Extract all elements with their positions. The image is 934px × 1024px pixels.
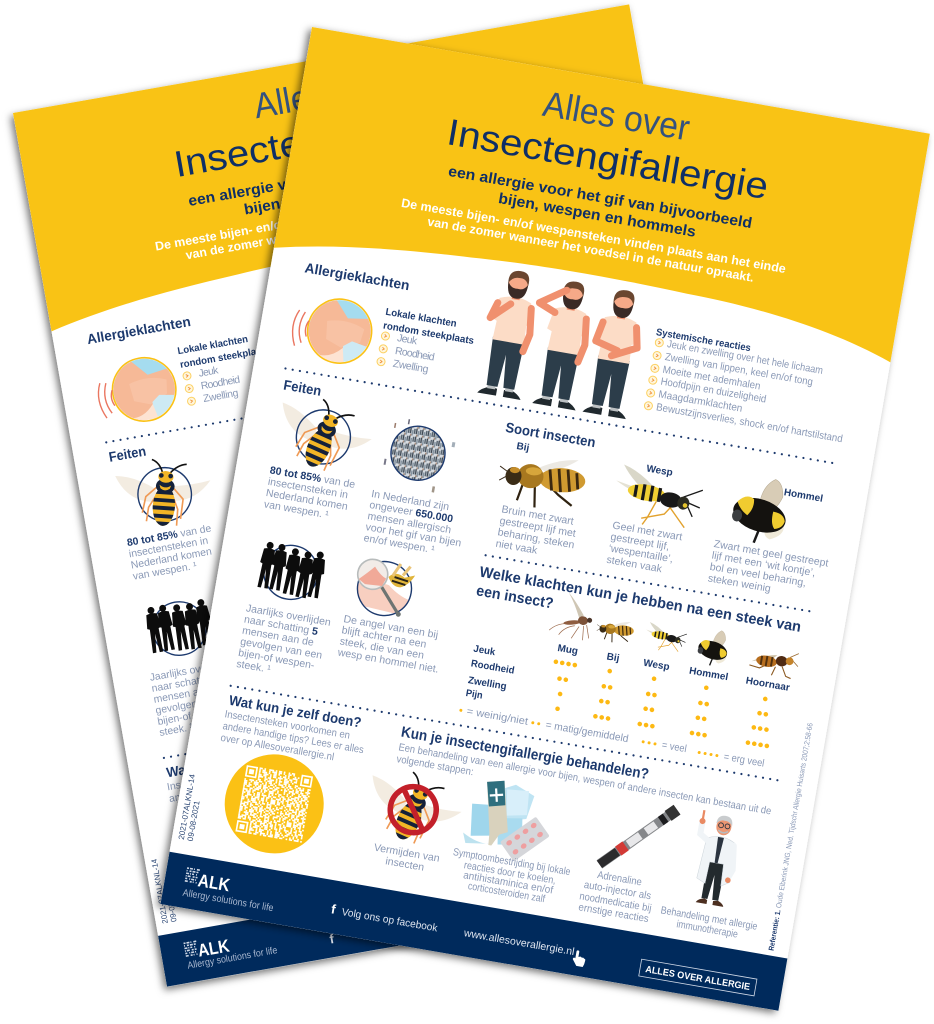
fact: deaths: naar schatting 5	[243, 613, 319, 638]
back fact: deaths: steek. ¹	[159, 722, 195, 739]
column: mug: Mug	[557, 643, 579, 657]
fact: deaths: bijen-of wespen-	[237, 647, 316, 672]
illustration: man with headache	[522, 276, 597, 410]
ALK logo: ALK	[196, 870, 231, 895]
back print code: 2021-07ALKNL-14	[150, 858, 170, 924]
illustration: man touching throat	[477, 267, 542, 400]
text: symptom relief	[447, 846, 572, 909]
row labels: Zwelling	[467, 675, 507, 693]
legend: = veel	[661, 739, 688, 755]
systemic reactions list: Moeite met ademhalen	[662, 364, 762, 392]
legend: = matig/gemiddeld	[545, 719, 630, 745]
local symptoms list: Lokale klachten	[385, 307, 457, 330]
local symptoms list: Jeuk	[396, 332, 419, 348]
row labels: Pijn	[465, 688, 484, 702]
back fact: deaths: gevolgen van een	[155, 692, 238, 717]
illustration: man with stomach ache	[582, 287, 647, 419]
back logo	[184, 927, 279, 972]
icon: prohibited wasp	[362, 764, 467, 855]
fact: deaths: mensen aan de	[241, 625, 315, 649]
fact: stinger: De angel van een bij	[343, 613, 439, 641]
back text: tips: andere handige tips?	[168, 777, 266, 805]
website link: www.allesoverallergie.nl	[462, 927, 575, 958]
text: avoid insects: insecten	[385, 855, 425, 874]
fact: wasps: insectensteken in	[267, 476, 349, 501]
title block	[398, 62, 810, 290]
back local symptoms	[177, 331, 278, 408]
text: bee description: beharing, steken	[497, 526, 575, 551]
text: wasp description: ‘wespentaille’,	[608, 542, 674, 565]
text: symptom relief: corticosteroiden zalf	[467, 880, 546, 905]
fact: deaths: steek. ¹	[235, 658, 272, 676]
systemic reactions list: Bewustzijnsverlies, shock en/of hartstilstand	[655, 401, 844, 445]
back title	[131, 41, 539, 267]
text: symptom relief: antihistaminica en/of	[462, 869, 554, 897]
text: bumblebee description: bol en veel beharing,	[709, 561, 807, 589]
front sheet paper	[161, 27, 930, 1011]
text: adrenaline	[577, 867, 656, 925]
title block: van de zomer wanneer het voedsel in de natuur opraakt.	[426, 215, 755, 285]
text: immunotherapy: immunotherapie	[676, 918, 739, 941]
fact: deaths: gevolgen van een	[239, 636, 323, 662]
QR code in yellow circle	[217, 747, 331, 861]
text: immunotherapy: Behandeling met allergie	[660, 904, 758, 933]
text: tips	[220, 708, 367, 768]
back icon: wasp	[113, 449, 218, 539]
icon: wasp in circle	[272, 391, 377, 482]
fact: wasps: van de	[320, 473, 356, 491]
footer band	[161, 852, 787, 1011]
icon: elbow with sting	[287, 292, 381, 373]
column: wesp: Wesp	[642, 658, 670, 673]
systemic reactions list: Hoofdpijn en duizeligheid	[660, 376, 767, 406]
icon: silhouettes in circle	[255, 540, 328, 605]
legend	[458, 704, 765, 770]
heading: wat kun je zelf doen: Wat kun je zelf doen?	[228, 692, 363, 730]
back local symptoms: Lokale klachten	[177, 334, 249, 357]
text: bumblebee description: lijf met een ‘wit kontje’,	[711, 549, 816, 579]
back fact: wasps: van wespen. ¹	[132, 561, 198, 583]
text: tips: over op Allesoverallergie.nl	[220, 732, 335, 763]
text: treatment intro: Een behandeling van een allergie voor bijen, wespen of andere insecten kan bestaan uit de	[398, 741, 772, 818]
back local symptoms: Roodheid	[200, 375, 241, 392]
title block: Insectengifallergie	[444, 111, 771, 207]
fact: wasps: Nederland komen	[265, 487, 349, 513]
complaints chart	[458, 578, 804, 772]
heading: allergieklachten: Allergieklachten	[304, 259, 411, 293]
text: bee description: gestreept lijf met	[499, 515, 577, 540]
text: symptom relief: reacties door te koelen,	[463, 859, 557, 887]
back print code	[150, 856, 179, 924]
back fact: wasps: van de	[177, 523, 212, 540]
column: mug	[536, 590, 596, 714]
back logo: ALK	[196, 936, 231, 961]
title block: De meeste bijen- en/of wespensteken vinden plaats aan het einde	[400, 196, 787, 276]
photo: bumblebee	[726, 473, 794, 548]
text: adrenaline: auto-injector als	[583, 879, 652, 902]
back fact: deaths: mensen aan de	[153, 683, 225, 706]
fact: wasps: van wespen. ¹	[263, 498, 330, 521]
back print code: 09-08-2021	[163, 881, 179, 923]
label: hommel: Hommel	[783, 487, 824, 505]
back footer band	[158, 827, 783, 987]
facebook link: Volg ons op facebook	[341, 906, 439, 935]
back facebook icon: f	[328, 931, 336, 947]
fact: wasps: 80 tot 85%	[269, 464, 323, 485]
column: bij	[581, 616, 637, 723]
back icon: elbow	[93, 352, 185, 433]
text: tips: Insectensteken voorkomen en	[224, 708, 351, 742]
back title: bijen, wespen en hommels	[243, 168, 441, 218]
icon: hand cursor	[572, 950, 587, 967]
heading: soort insecten: Soort insecten	[504, 419, 597, 450]
text: bumblebee description: Zwart met geel gestreept	[713, 538, 829, 570]
back logo: Allergy solutions for life	[187, 945, 279, 972]
fact: deaths: Jaarlijks overlijden	[245, 602, 332, 629]
column: bij: Bij	[606, 651, 620, 664]
text: wasp description: gestreept lijf,	[610, 531, 670, 553]
fact: stinger: wesp en hommel niet.	[336, 646, 440, 676]
yellow header	[273, 27, 930, 362]
back local symptoms: Jeuk	[198, 365, 220, 380]
row labels: Jeuk	[473, 644, 497, 658]
illustration: doctor	[686, 810, 742, 907]
title block: Alles over	[540, 83, 693, 148]
icon: crowd in circle	[380, 416, 458, 495]
text: avoid insects: Vermijden van	[373, 842, 441, 865]
back title: Alles over	[251, 61, 402, 126]
label: bij: Bij	[516, 441, 530, 454]
back local symptoms: rondom steekplaats	[179, 344, 271, 371]
heading: feiten: Feiten	[282, 377, 323, 399]
column: hommel: Hommel	[688, 666, 729, 683]
back icon: people	[143, 597, 216, 660]
text: bee description: Bruin met zwart	[501, 503, 575, 528]
systemic reactions list: Maagdarmklachten	[658, 388, 743, 415]
systemic reactions list: Jeuk en zwelling over het hele lichaam	[666, 338, 824, 377]
back fact: wasps: Nederland komen	[130, 546, 213, 572]
back fact: wasps: 80 tot 85%	[126, 529, 179, 549]
title block: bijen, wespen en hommels	[497, 190, 697, 241]
systemic reactions list: Zwelling van lippen, keel en/of tong	[664, 351, 814, 388]
illustration: auto-injector	[596, 805, 681, 869]
column: hoornaar: Hoornaar	[745, 675, 791, 694]
heading: behandelen: Kun je insectengifallergie behandelen?	[400, 724, 650, 783]
back heading: feiten: Feiten	[107, 443, 147, 465]
ALK logo: Allergy solutions for life	[182, 888, 275, 914]
label: wesp: Wesp	[645, 463, 673, 479]
column: wesp	[630, 622, 688, 732]
back title: van de zomer wanneer het voedsel in de natuur opraakt.	[185, 192, 510, 262]
reference note: Referentie: 1. Oude Elberink JNG, Ned. Tijdschr Allergie Huisarts 2007;2:58-66	[767, 722, 815, 951]
text: bee description: niet vaak	[495, 538, 539, 557]
fact: allergic people: en/of wespen. ¹	[363, 532, 436, 556]
fact: allergic people: ongeveer 650.000	[368, 499, 454, 525]
systemic reactions list: Systemische reacties	[655, 327, 752, 354]
local symptoms list	[376, 307, 478, 383]
heading: welke klachten: een insect?	[475, 582, 555, 612]
back fact: wasps: insectensteken in	[128, 536, 209, 560]
column: hoornaar	[735, 646, 800, 751]
row labels	[465, 644, 518, 706]
text: adrenaline: ernstige reacties	[578, 901, 650, 925]
photo: wasp	[610, 464, 705, 534]
print code: 2021-07ALKNL-14	[177, 773, 197, 840]
badge: alles over allergie: ALLES OVER ALLERGIE	[645, 964, 751, 993]
text: wasp description: Geel met zwart	[612, 520, 683, 543]
ALK logo	[182, 868, 278, 914]
fact: allergic people: mensen allergisch	[367, 510, 452, 536]
print code	[177, 773, 206, 842]
local symptoms list: Zwelling	[392, 358, 430, 376]
fact: stinger: blijft achter na een	[341, 624, 428, 651]
row labels: Roodheid	[470, 658, 515, 677]
illustration: cream, ice and tablets	[460, 775, 558, 867]
back title: Insectengifallergie	[171, 89, 495, 185]
local symptoms list: rondom steekplaats	[382, 321, 475, 347]
legend: = erg veel	[723, 751, 765, 770]
photo: bee	[498, 455, 587, 511]
text: immunotherapy	[658, 904, 758, 944]
column: hommel	[678, 626, 736, 740]
back heading: allergieklachten: Allergieklachten	[86, 313, 192, 347]
back sheet paper	[13, 4, 783, 987]
text: bumblebee description: steken weinig	[707, 572, 772, 595]
local symptoms list: Roodheid	[394, 345, 436, 364]
back local symptoms: Zwelling	[202, 388, 240, 405]
title block: een allergie voor het gif van bijvoorbeeld	[447, 163, 753, 232]
back poster	[13, 4, 783, 987]
text: symptom relief: Symptoombestrijding bij lokale	[452, 846, 572, 878]
back title: een allergie voor het gif van bijvoorbeeld	[187, 141, 490, 210]
back yellow header	[13, 4, 669, 339]
front poster	[161, 27, 930, 1011]
back text: tips: Insectensteken voorkomen en	[166, 758, 305, 793]
text: treatment intro: volgende stappen:	[396, 753, 475, 778]
text: adrenaline: Adrenaline	[596, 869, 643, 889]
text: wasp description: steken vaak	[606, 554, 664, 575]
systemic reactions list	[642, 327, 856, 445]
icon: magnifier on skin	[356, 558, 415, 617]
legend: = weinig/niet	[466, 705, 529, 728]
back title: De meeste bijen- en/of wespensteken vinden plaats aan het einde	[154, 173, 537, 254]
print code: 09-08-2021	[186, 800, 202, 842]
facebook link: f	[330, 901, 337, 917]
back fact: deaths: bijen-of wespen-	[157, 704, 234, 728]
back heading: wat kun je zelf doen: Wat kun je zelf doen?	[165, 742, 299, 780]
text: adrenaline: noodmedicatie bij	[578, 890, 652, 915]
fact: allergic people: In Nederland zijn	[370, 488, 450, 513]
heading: welke klachten: Welke klachten kun je hebben na een steek van	[478, 564, 802, 636]
back fact: deaths: naar schatting 5	[151, 671, 226, 695]
fact: allergic people: voor het gif van bijen	[365, 521, 462, 549]
fact: stinger: steek, die van een	[339, 635, 425, 662]
back fact: deaths: Jaarlijks overlijden	[149, 658, 235, 684]
text: tips: andere handige tips? Lees er alles	[222, 720, 365, 756]
